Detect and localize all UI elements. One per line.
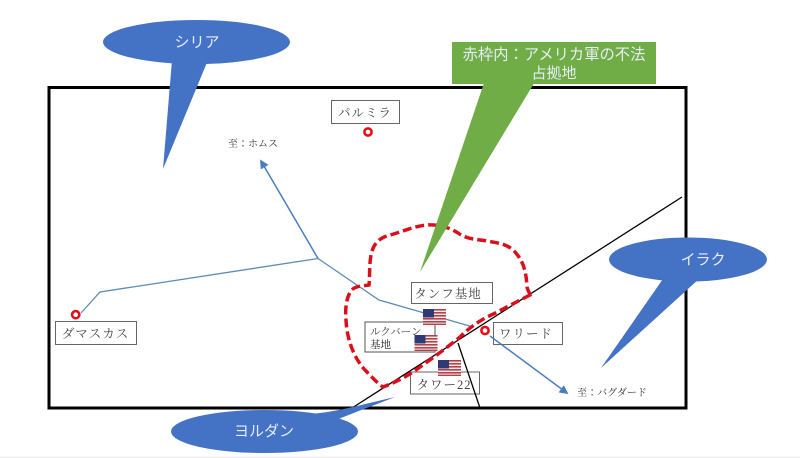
callout: occupied zone note: 赤枠内：アメリカ軍の不法 — [463, 46, 645, 64]
icon: US flag Tanf — [423, 309, 446, 325]
road network — [81, 161, 567, 393]
label: Tower 22 — [410, 372, 480, 394]
label: Tower 22: タワー22 — [416, 378, 472, 392]
callout: occupied zone note: 占拠地 — [531, 65, 577, 82]
marker: Palmyra — [364, 128, 372, 136]
label: to Homs: 至：ホムス — [228, 138, 278, 150]
occupied zone red dashed outline — [346, 225, 530, 387]
map frame — [49, 88, 686, 408]
label: Tanf base: タンフ基地 — [414, 286, 482, 301]
label: Rukban base: 基地 — [370, 338, 391, 351]
label: Damascus: ダマスカス — [62, 327, 129, 341]
icon: US flag Tower 22 — [438, 360, 461, 376]
label: Rukban base — [365, 322, 435, 352]
marker: Damascus — [72, 311, 79, 318]
label: Palmyra — [332, 100, 400, 124]
callout: Jordan — [171, 397, 395, 453]
callout: Jordan: ヨルダン — [234, 423, 294, 440]
label: Damascus — [56, 322, 136, 344]
callout: Iraq — [601, 238, 767, 368]
marker: Waleed — [481, 327, 489, 334]
callout: Syria: シリア — [174, 34, 220, 51]
callout: Syria — [103, 20, 290, 169]
label: Tanf base — [412, 282, 492, 304]
label: Palmyra: パルミラ — [338, 106, 392, 120]
label: Waleed — [494, 322, 562, 344]
callout: Iraq: イラク — [680, 252, 726, 268]
label: Waleed: ワリード — [499, 327, 553, 341]
label: Rukban base: ルクバーン — [370, 326, 421, 338]
bottom edge strip — [0, 456, 800, 458]
border lines — [352, 197, 682, 408]
callout: occupied zone note — [420, 42, 656, 272]
label: to Baghdad: 至：バグダード — [577, 387, 647, 399]
icon: US flag Rukban — [414, 335, 438, 351]
